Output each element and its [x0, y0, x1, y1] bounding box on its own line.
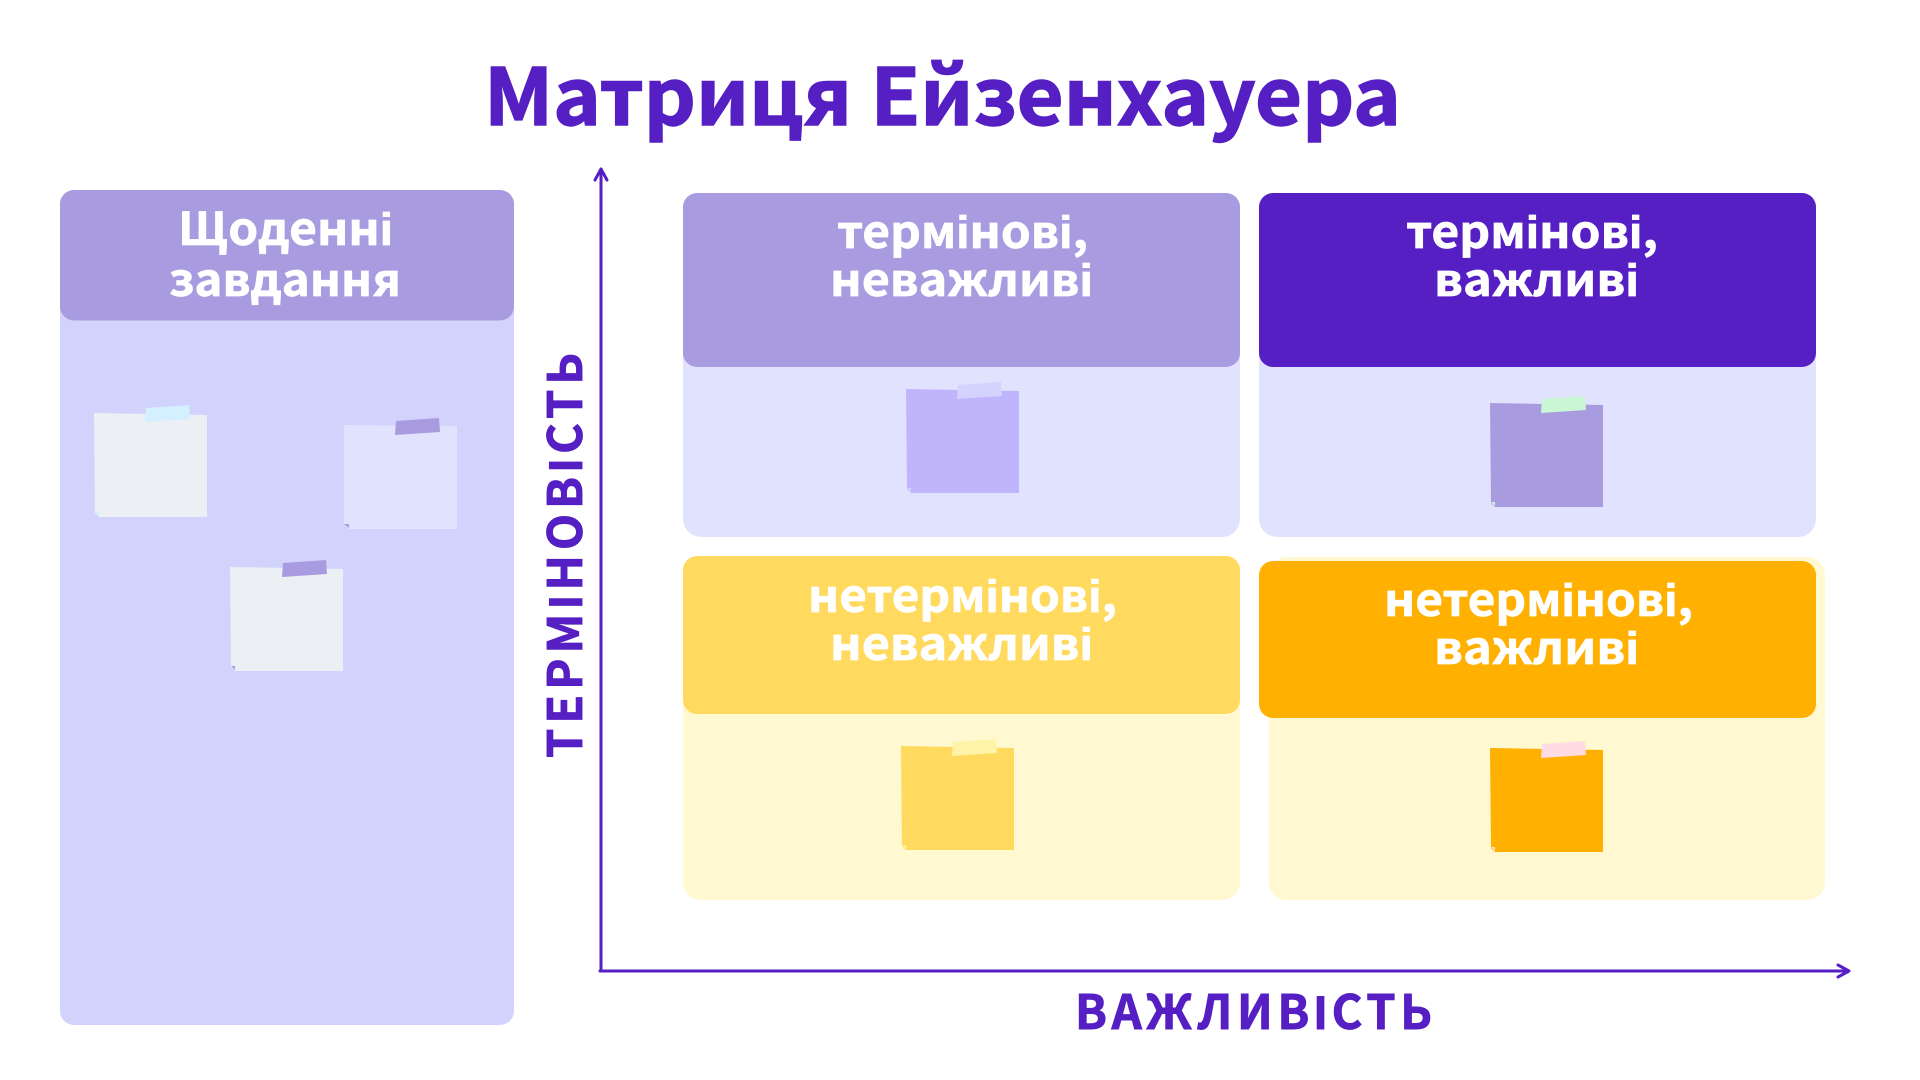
quadrant heading: нетермінові, — [808, 560, 1117, 625]
quadrant heading: важливі — [1434, 612, 1639, 677]
sticky note 3 — [230, 560, 343, 671]
daily tasks heading: завдання — [169, 244, 401, 309]
title: Матриця Ейзенхауера — [484, 36, 1401, 148]
quadrant header — [683, 193, 1240, 367]
daily tasks header — [60, 190, 514, 320]
quadrant body — [1269, 557, 1825, 900]
axis: importance arrow — [600, 965, 1849, 977]
quadrant body — [683, 556, 1240, 900]
quadrant heading: термінові, — [1406, 196, 1658, 261]
quadrant header — [1259, 193, 1816, 367]
daily tasks body — [60, 190, 514, 1025]
panel: not urgent, important — [1259, 557, 1825, 900]
sticky note — [906, 382, 1019, 493]
panel: not urgent, not important — [683, 556, 1240, 900]
quadrant heading — [1384, 564, 1693, 677]
quadrant body — [683, 193, 1240, 537]
quadrant heading: неважливі — [830, 244, 1093, 309]
daily tasks heading — [169, 193, 401, 309]
quadrant heading: важливі — [1434, 244, 1639, 309]
sticky note — [901, 739, 1014, 850]
quadrant body — [1259, 193, 1816, 537]
sticky note — [1490, 741, 1603, 852]
quadrant heading — [830, 196, 1093, 309]
daily tasks heading: Щоденні — [178, 193, 393, 258]
sticky note 2 — [344, 418, 457, 529]
axis label: urgency: ТЕРМІНОВІСТЬ — [527, 349, 596, 758]
panel: urgent, important — [1259, 193, 1816, 537]
quadrant heading — [808, 560, 1117, 673]
quadrant heading: нетермінові, — [1384, 564, 1693, 629]
axis: urgency arrow — [595, 169, 607, 971]
panel: daily tasks — [60, 190, 514, 1025]
quadrant heading — [1406, 196, 1658, 309]
sticky note — [1490, 396, 1603, 507]
quadrant header — [683, 556, 1240, 714]
quadrant heading: неважливі — [830, 608, 1093, 673]
sticky note 1 — [94, 405, 207, 517]
quadrant heading: термінові, — [837, 196, 1088, 261]
quadrant header — [1259, 561, 1816, 718]
panel: urgent, not important — [683, 193, 1240, 537]
axis label: importance: ВАЖЛИВІСТЬ — [1075, 974, 1436, 1043]
